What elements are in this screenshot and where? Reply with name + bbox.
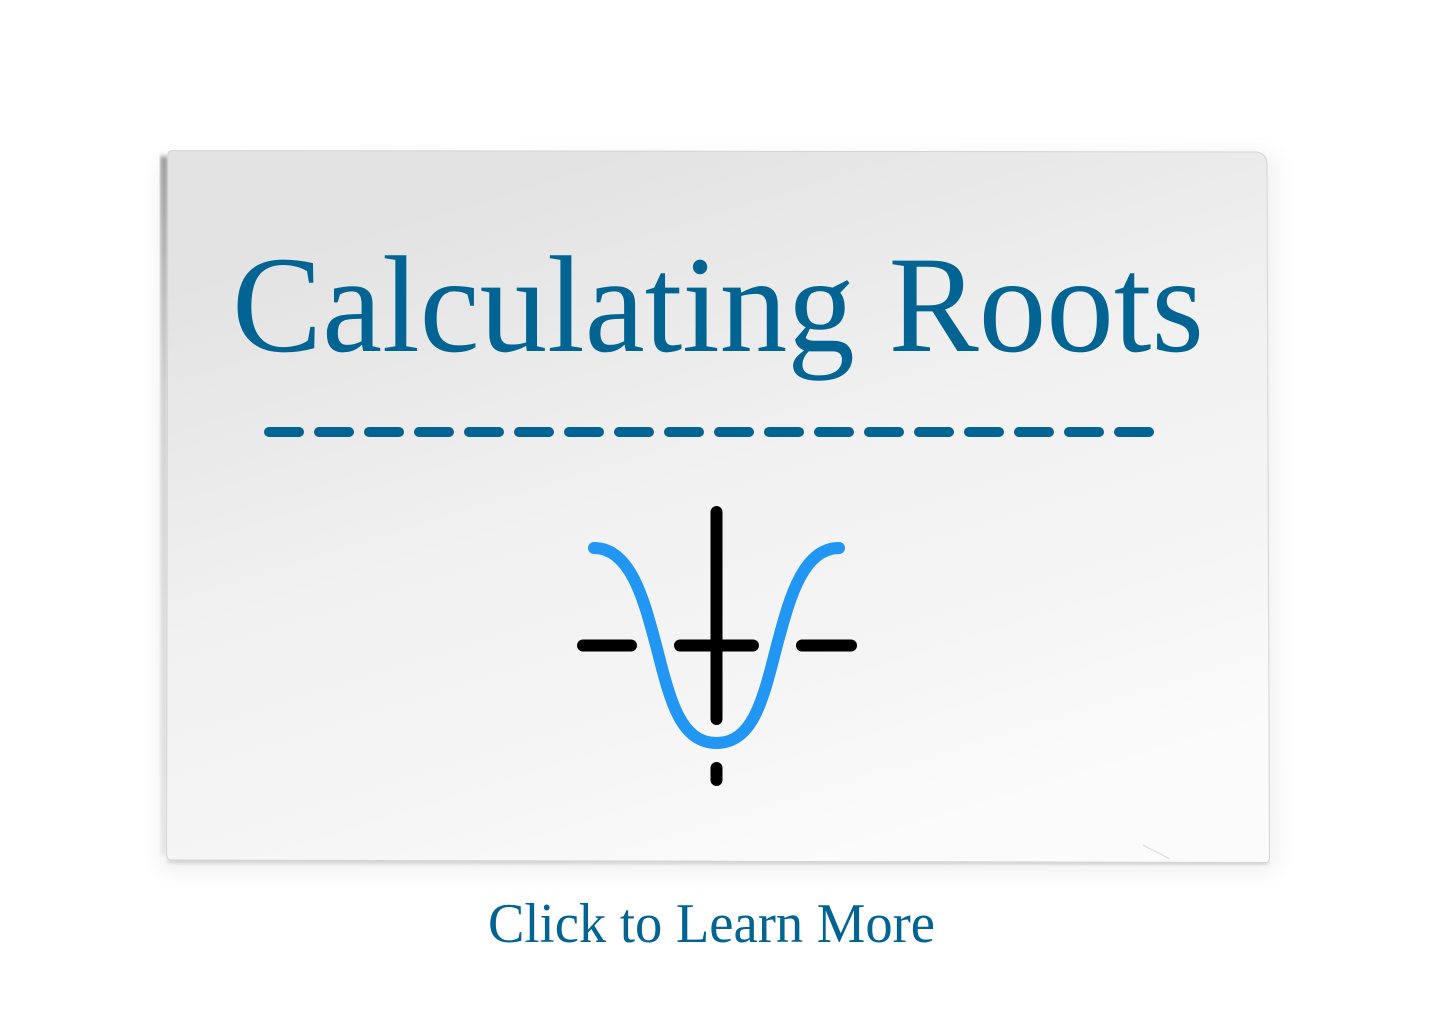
title: Calculating Roots [232, 228, 1204, 381]
panel: paper card [160, 150, 1276, 872]
dashed divider [269, 427, 1150, 437]
icon: parabola crossing axes [583, 512, 851, 780]
icon: axes [583, 512, 851, 780]
icon: blue curve [594, 548, 839, 743]
call to action: Click to Learn More [488, 893, 935, 955]
